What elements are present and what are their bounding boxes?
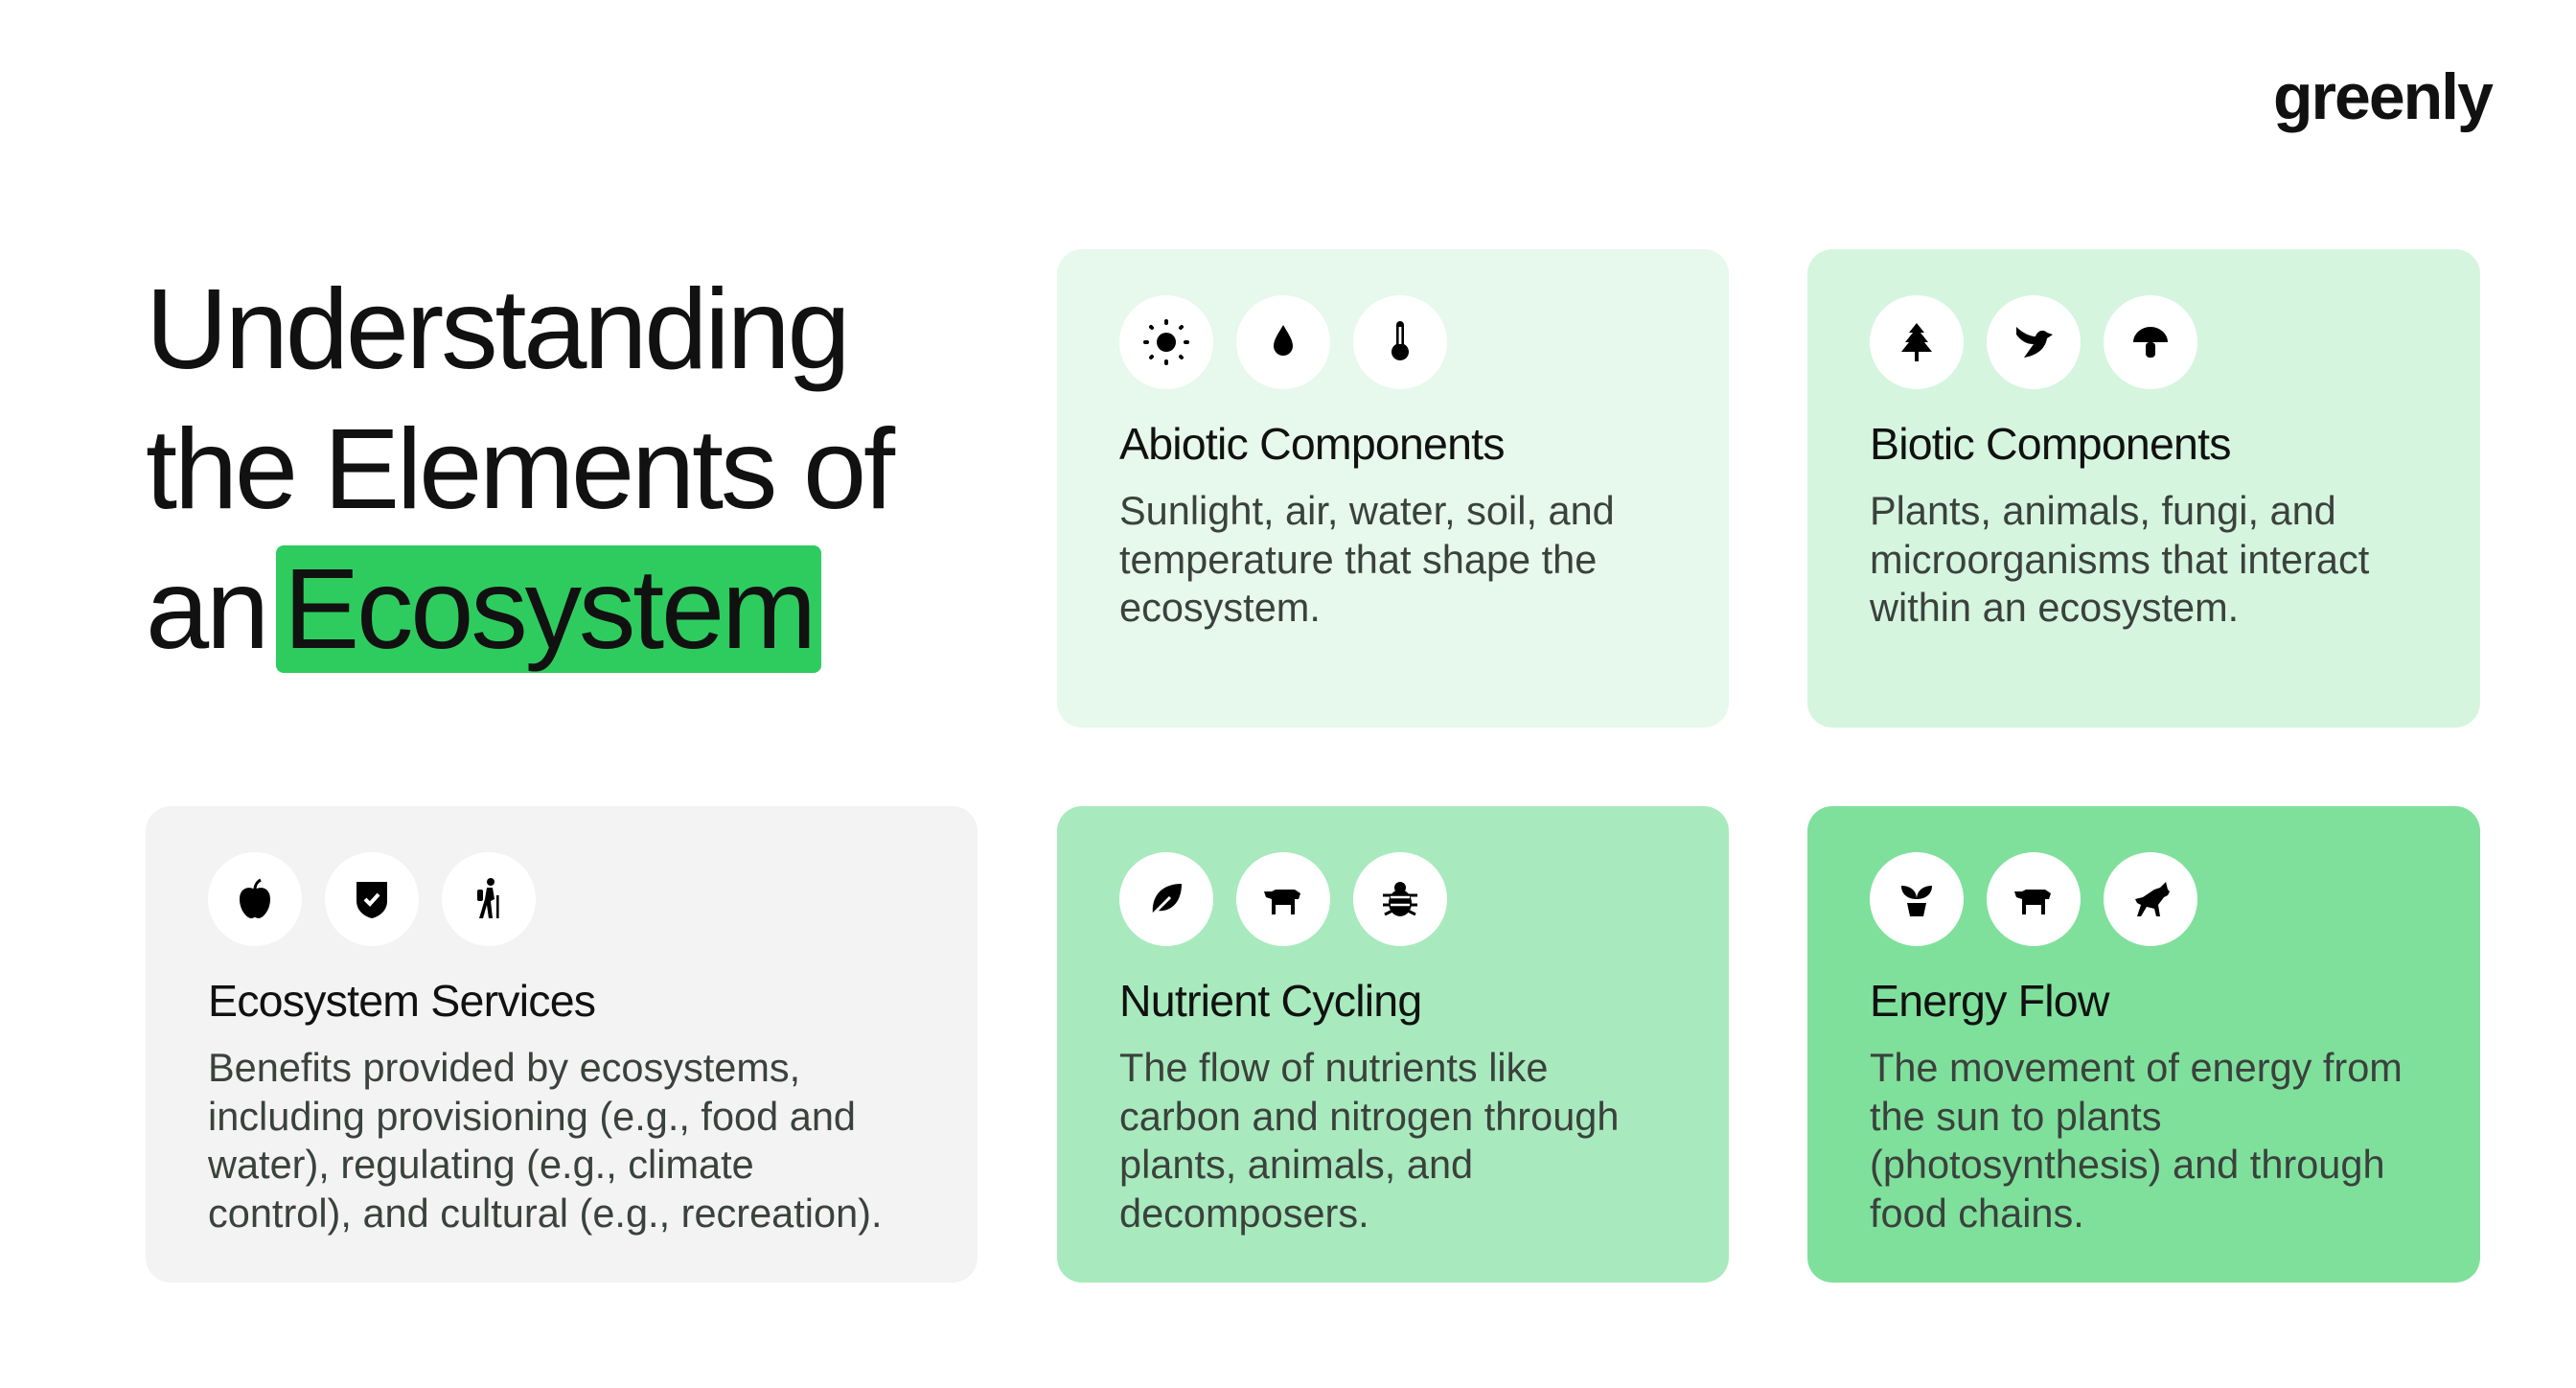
heading: abiotic: Abiotic Components — [1119, 419, 1505, 469]
heading: services: Ecosystem Services — [208, 976, 595, 1026]
heading: nutrient: Nutrient Cycling — [1119, 976, 1421, 1026]
panel: services — [146, 806, 978, 1283]
panel: energy flow — [1807, 806, 2480, 1283]
title: Understanding — [146, 266, 847, 393]
icons: nutrient — [1119, 852, 1447, 946]
heading: biotic: Biotic Components — [1870, 419, 2231, 469]
text: energy: The movement of energy from the sun to plants (photosynthesis) and through food chains. — [1870, 1045, 2403, 1235]
panel: biotic — [1807, 249, 2480, 728]
panel: nutrient cycling — [1057, 806, 1729, 1283]
title: the Elements of — [146, 405, 892, 533]
logo: greenly — [2273, 60, 2492, 133]
title — [146, 266, 895, 673]
icons: abiotic — [1119, 295, 1447, 389]
heading: energy: Energy Flow — [1870, 976, 2109, 1026]
panel: abiotic — [1057, 249, 1729, 728]
text: services: Benefits provided by ecosystems, including provisioning (e.g., food and water), regulating (e.g., climate control), and cultural (e.g., recreation). — [208, 1045, 883, 1235]
text: nutrient: The flow of nutrients like carbon and nitrogen through plants, animals, and decomposers. — [1119, 1045, 1619, 1235]
text: biotic: Plants, animals, fungi, and microorganisms that interact within an ecosystem. — [1870, 488, 2369, 630]
icons: services — [208, 852, 536, 946]
title: an Ecosystem — [146, 545, 814, 673]
text: abiotic: Sunlight, air, water, soil, and temperature that shape the ecosystem. — [1119, 488, 1615, 630]
icons: biotic — [1870, 295, 2197, 389]
icons: energy — [1870, 852, 2197, 946]
